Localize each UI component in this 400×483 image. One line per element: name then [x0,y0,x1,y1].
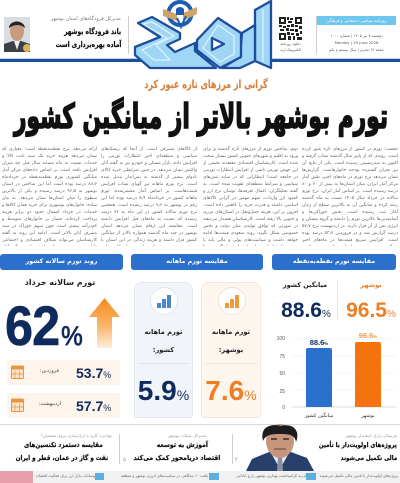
icon: calendar [11,366,24,379]
national label: میانگین کشور [283,281,327,289]
bar chart: 0 [282,405,285,411]
bar chart: 50 [279,371,285,377]
logo emblem [163,2,197,27]
row: Farvardin [7,360,120,385]
divider [232,434,233,464]
page mark: ۵ [123,457,126,463]
big number 62%: 62% [5,294,83,357]
value 7.6%: 7.6% [205,375,257,406]
ticker marker 1 [95,473,104,480]
ticker marker 3 [306,473,316,480]
divider [205,363,257,364]
panel: point-to-point inflation [272,254,396,419]
bar chart: 100 [277,336,285,342]
teaser kicker: مدیرکل فرودگاه‌های استان بوشهر [51,16,121,22]
value: 57.7% [76,398,111,414]
card label: تورم ماهانه [144,328,183,336]
icon: bar chart blue [150,287,178,315]
row: Ordibehesht [7,393,120,418]
value 96.5%: 96.5% [346,299,396,322]
QR caption [280,42,301,52]
date Hijri: جمعه ۱۴ محرم | سال بیستم و یکم [329,47,384,52]
bar chart: 75 [279,354,285,360]
label: فروردین: [40,368,59,374]
panel heading [131,254,263,270]
page mark: ۲ [235,457,238,463]
card label [212,328,250,354]
bar chart [277,332,396,419]
kicker: مدیرکل شیلات بوشهر [168,433,206,438]
header teaser: airport runway [4,16,122,52]
panel heading: مقایسه تورم ماهانه [166,258,228,265]
bar chart: 25 [279,389,285,395]
divider [119,434,120,464]
footer photo [246,424,314,471]
divider [138,363,189,364]
icon: bar chart orange [218,287,246,315]
annual title: تورم سالانه خرداد [25,278,95,287]
header rule [0,58,400,62]
divider [128,16,129,54]
panel: annual inflation trend [0,254,123,418]
teaser headline line 2: آماده بهره‌برداری است [55,40,121,49]
bar chart: بوشهر [360,413,375,419]
ticker marker 2 [209,473,219,480]
label: اردیبهشت: [39,401,61,407]
publication banner [317,16,396,25]
news ticker [0,471,400,483]
headline line 1: مقایسه دستمزد تکنسین‌های [24,441,103,449]
panel: monthly inflation [131,254,263,418]
publication banner: روزنامه سیاسی، اجتماعی و فرهنگی [326,18,387,23]
kicker: مهاجرت کاری یا ارزان‌سازی نیروی متخصص؟ [41,433,112,438]
headline line 2: مالی تکمیل می‌شوند [340,454,397,462]
headline line 2: نفت و گاز در عمان، قطر و ایران [15,454,108,462]
icon: calendar [11,398,24,412]
teaser photo [4,17,30,52]
subtitle: گرانی از مرزهای تازه عبور کرد [144,78,268,91]
kicker: پارسیان زارع، استاندار بوشهر [346,433,397,438]
card: Bushehr [201,282,261,418]
footer teaser: technicians wages [15,433,112,462]
card: national [134,282,193,418]
footer rule [0,424,400,425]
card label: تورم ماهانه [212,328,250,336]
panel heading: روند تورم سالانه کشور [26,258,97,265]
card label: کشور: [153,346,174,354]
value: 53.7% [76,365,111,381]
panel heading [272,254,396,270]
masthead logo [134,0,272,70]
footer teaser: fisheries [133,433,220,462]
footer teaser: priority projects [319,433,397,462]
date Persian: دوشنبه ۸ تیر ۱۴۰۵ | شماره ۱۰۰۰ [330,33,383,38]
bar chart: میانگین کشور [304,412,334,419]
divider [337,280,338,320]
icon: up arrow [89,298,120,348]
panel heading: مقایسه تورم نقطه‌به‌نقطه [293,258,375,265]
card label [144,328,183,354]
QR caption: دانلود روزنامه [280,42,301,46]
publication box [317,16,396,52]
QR code [279,17,302,40]
headline line 1: پروژه‌های اولویت‌دار با تأمین [319,441,397,449]
date English: Monday | 29 June 2026 [335,40,378,45]
card label: بوشهر: [219,346,243,354]
value 88.6%: 88.6% [281,299,331,322]
Bushehr label: بوشهر [360,281,382,289]
headline line 1: آموزش به توسعه [157,441,208,449]
ticker badge [0,471,33,483]
QR caption: الکترونیک ارند [280,48,301,52]
divider [316,16,317,54]
bar: national: 88.6% [310,338,328,347]
teaser headline line 1: باند فرودگاه بوشهر [64,27,121,36]
headline line 2: اقتصاد دریامحور کمک می‌کند [133,454,220,462]
panel heading [0,254,123,270]
value 5.9%: 5.9% [138,375,189,406]
